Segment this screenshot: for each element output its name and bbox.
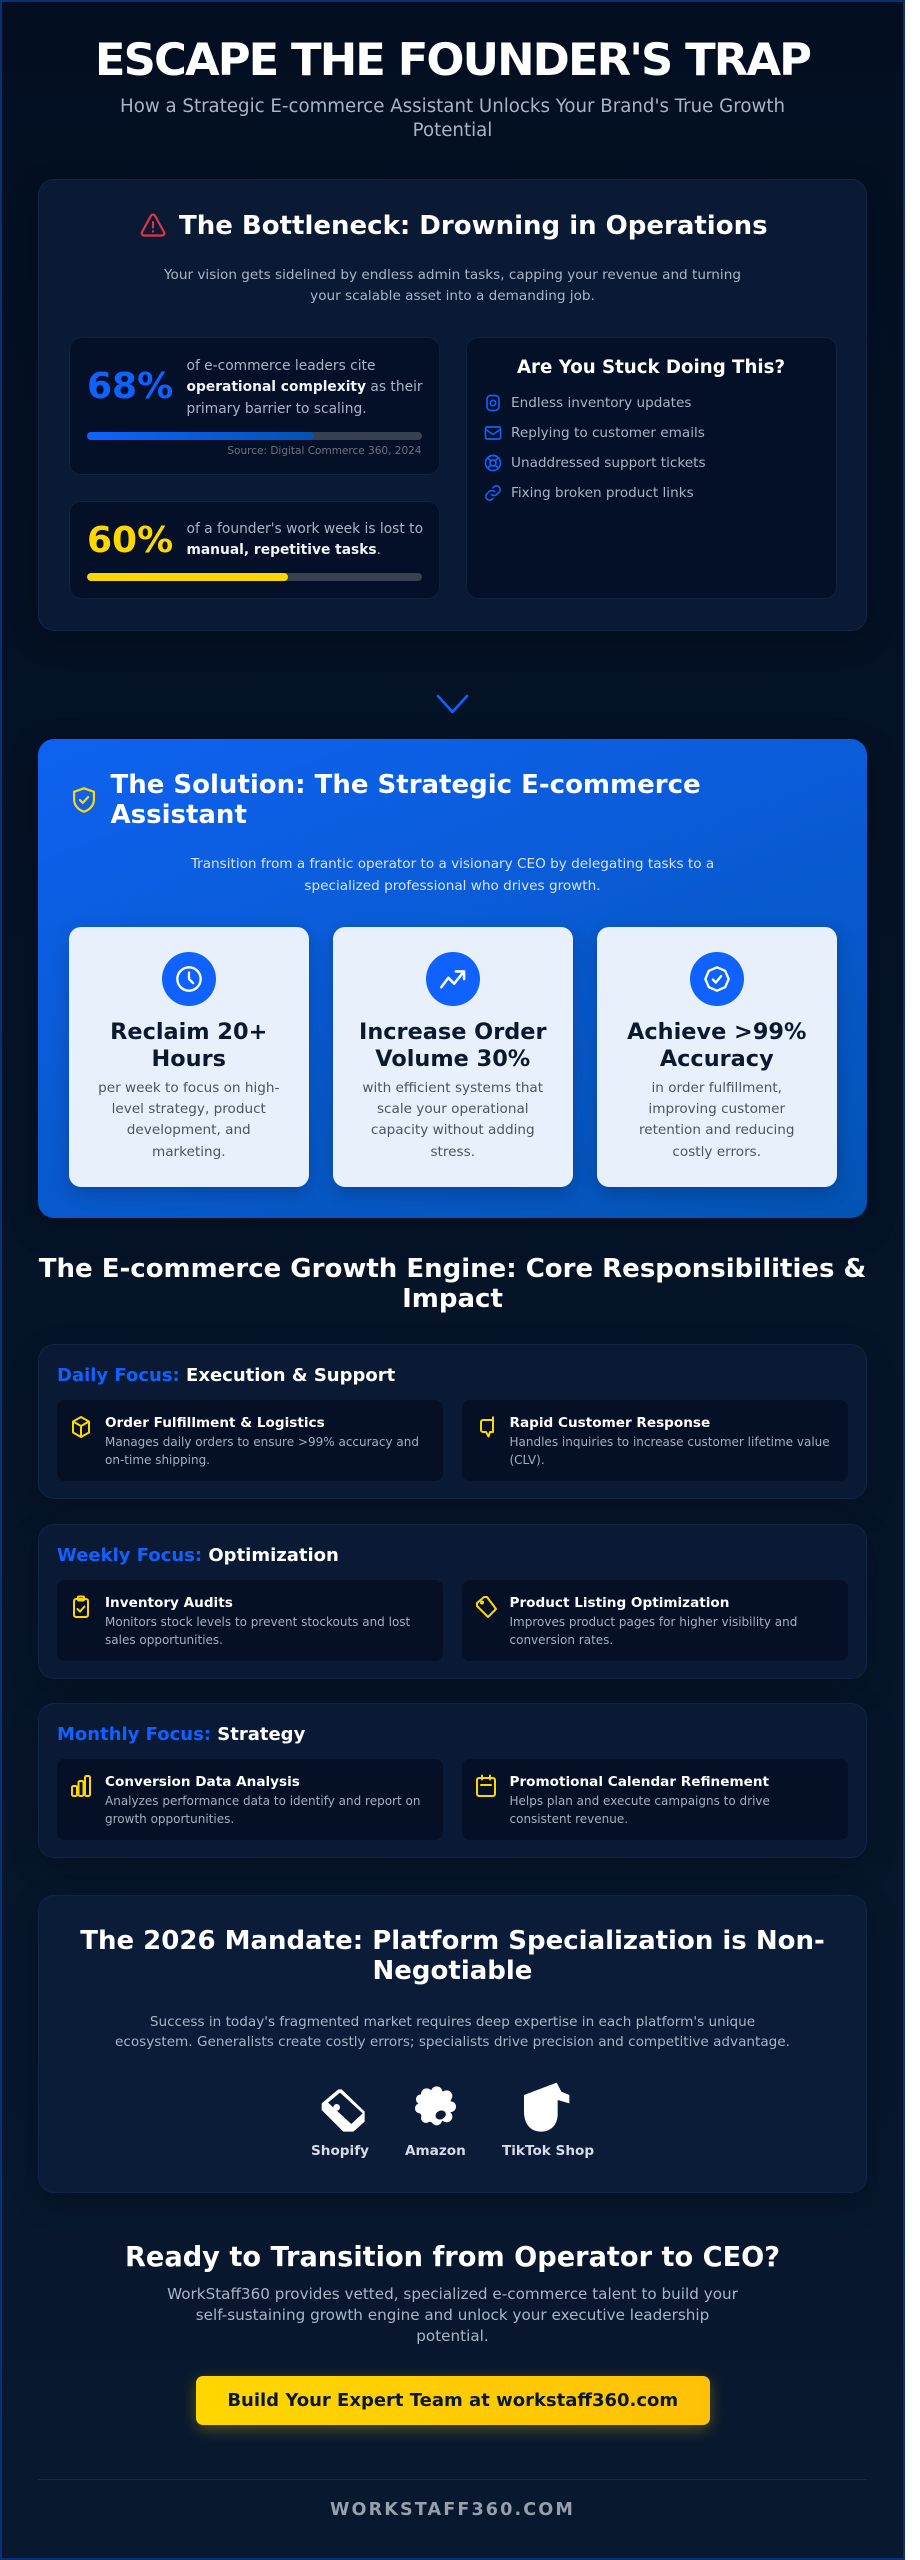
task text: Handles inquiries to increase customer lifetime value [510, 1435, 830, 1449]
button: build your team [196, 2376, 710, 2425]
icon: inventory [486, 394, 500, 412]
icon: Shopify [322, 2089, 365, 2132]
task text: Monitors stock levels to prevent stockouts and lost [105, 1615, 410, 1629]
button: build your team: Build Your Expert Team at workstaff360.com [227, 2390, 678, 2411]
heading: growth engine [38, 1254, 866, 1314]
focus heading: Monthly Focus: Strategy [57, 1724, 305, 1745]
task text [510, 1435, 830, 1467]
icon: warning triangle [140, 214, 166, 237]
task title: Conversion Data Analysis [105, 1774, 300, 1790]
text: solution intro: Transition from a frantic operator to a visionary CEO by delegating tasks to a [191, 856, 714, 872]
task title: Order Fulfillment & Logistics [105, 1414, 325, 1430]
subtitle [120, 96, 785, 141]
task title: Rapid Customer Response [510, 1414, 710, 1430]
text: mandate intro: Success in today's fragmented market requires deep expertise in each platform's unique [150, 2014, 755, 2030]
text: mandate intro: ecosystem. Generalists create costly errors; specialists drive precision and competitive advantage. [115, 2034, 790, 2050]
text: solution intro [190, 856, 714, 894]
icon: calendar [476, 1774, 496, 1797]
platform: Shopify [311, 2089, 369, 2159]
panel: the bottleneck [38, 179, 867, 631]
stat text: primary barrier to scaling. [186, 401, 367, 417]
card: reclaim hours [69, 927, 308, 1187]
task text: Manages daily orders to ensure >99% accuracy and [105, 1435, 419, 1449]
heading: 2026 mandate: The 2026 Mandate: Platform Specialization is Non- [80, 1926, 825, 1956]
task: order fulfillment [57, 1400, 443, 1481]
task text: Analyzes performance data to identify and report on [105, 1794, 420, 1808]
task: conversion data [57, 1759, 443, 1840]
task title: Promotional Calendar Refinement [510, 1774, 769, 1790]
card text: marketing. [152, 1144, 226, 1160]
heading: the bottleneck: The Bottleneck: Drowning in Operations [179, 210, 768, 240]
icon: support lifebuoy [484, 454, 502, 472]
card text [98, 1080, 279, 1160]
stat card: 60% [69, 501, 440, 599]
stat text [186, 521, 423, 558]
card title: Achieve >99% [627, 1018, 806, 1044]
task text: conversion rates. [510, 1633, 613, 1647]
focus heading: Daily Focus: Execution & Support [57, 1365, 395, 1386]
footer: WORKSTAFF360.COM [330, 2500, 575, 2520]
text: call to action: WorkStaff360 provides vetted, specialized e-commerce talent to build your [167, 2284, 738, 2302]
panel: monthly focus [38, 1703, 867, 1858]
label: Amazon [405, 2143, 466, 2159]
icon: badge check [690, 952, 744, 1006]
subtitle: How a Strategic E-commerce Assistant Unlocks Your Brand's True Growth [120, 96, 785, 117]
panel: 2026 mandate [38, 1895, 867, 2193]
stat card: 68% [69, 337, 440, 475]
platform: TikTok Shop [502, 2060, 594, 2180]
task text: Helps plan and execute campaigns to drive [510, 1794, 770, 1808]
panel: daily focus [38, 1344, 867, 1499]
card text [362, 1080, 543, 1160]
stat value: 68%: 68% [87, 366, 173, 407]
heading: growth engine: Impact [402, 1284, 503, 1314]
stat text [186, 358, 423, 417]
icon: link [485, 485, 501, 501]
item: inventory updates: Endless inventory updates [511, 395, 691, 411]
card text: retention and reducing [639, 1122, 795, 1138]
card text: scale your operational [377, 1101, 529, 1117]
panel: the solution [38, 739, 867, 1218]
card text: capacity without adding [371, 1122, 535, 1138]
progress bar: 60% [87, 573, 422, 581]
icon: box [72, 1416, 90, 1438]
task: promotional calendar [462, 1759, 848, 1840]
item: support tickets: Unaddressed support tickets [511, 455, 706, 471]
stat text: operational complexity as their [186, 379, 423, 395]
heading: growth engine: The E-commerce Growth Engine: Core Responsibilities & [39, 1254, 866, 1284]
focus heading: Weekly Focus: Optimization [57, 1545, 339, 1566]
card text: in order fulfillment, [652, 1080, 782, 1096]
card text: per week to focus on high- [98, 1080, 279, 1096]
text: call to action [0, 2284, 905, 2346]
task text [105, 1615, 410, 1647]
heading: the solution [110, 770, 701, 830]
task title: Product Listing Optimization [510, 1594, 729, 1610]
icon: email [484, 426, 502, 440]
task text: Improves product pages for higher visibility and [510, 1615, 797, 1629]
text: call to action: potential. [416, 2326, 489, 2344]
text: call to action: self-sustaining growth engine and unlock your executive leadership [196, 2306, 709, 2324]
task text [105, 1435, 419, 1467]
task title: Inventory Audits [105, 1594, 233, 1610]
text: bottleneck intro: Your vision gets sidelined by endless admin tasks, capping your revenue and turning [164, 266, 741, 282]
task text: on-time shipping. [105, 1453, 210, 1467]
item: customer emails: Replying to customer emails [511, 425, 705, 441]
text: bottleneck intro: your scalable asset into a demanding job. [310, 288, 595, 304]
task: customer response [462, 1400, 848, 1481]
icon: Amazon [405, 2060, 465, 2180]
task: product listing [462, 1580, 848, 1661]
stat text: manual, repetitive tasks. [186, 542, 381, 558]
task text: (CLV). [510, 1453, 545, 1467]
label: TikTok Shop [502, 2143, 594, 2159]
task text: consistent revenue. [510, 1812, 628, 1826]
progress bar: 68% [87, 432, 422, 440]
heading: call to action: Ready to Transition from Operator to CEO? [125, 2242, 780, 2272]
heading: 2026 mandate [80, 1926, 825, 1986]
icon: clock [162, 952, 216, 1006]
task text: sales opportunities. [105, 1633, 223, 1647]
text: solution intro: specialized professional who drives growth. [304, 878, 601, 894]
card title: Hours [152, 1046, 226, 1072]
panel: are you stuck checklist [466, 337, 836, 599]
card title: Reclaim 20+ [110, 1018, 267, 1044]
heading: the solution: The Solution: The Strategic E-commerce [110, 770, 701, 800]
title: ESCAPE THE FOUNDER'S TRAP [95, 33, 810, 86]
icon: tag [476, 1596, 497, 1618]
card text: improving customer [648, 1101, 785, 1117]
stat value: 60%: 60% [87, 520, 173, 561]
heading: are you stuck: Are You Stuck Doing This? [517, 357, 785, 378]
icon: shield check [72, 787, 96, 813]
card text: with efficient systems that [362, 1080, 543, 1096]
card: increase orders [333, 927, 572, 1187]
card text: stress. [430, 1144, 475, 1160]
task text [105, 1794, 420, 1826]
heading: 2026 mandate: Negotiable [373, 1956, 532, 1986]
card title: Volume 30% [375, 1046, 530, 1072]
card title [110, 1018, 267, 1072]
label: Shopify [311, 2143, 369, 2159]
card text: development, and [127, 1122, 251, 1138]
icon: trending up [426, 952, 480, 1006]
card: accuracy [597, 927, 836, 1187]
task: inventory audits [57, 1580, 443, 1661]
platform: Amazon [405, 2086, 466, 2159]
card title: Accuracy [660, 1046, 774, 1072]
task text [510, 1794, 770, 1826]
card text [639, 1080, 795, 1160]
text: bottleneck intro [164, 266, 741, 304]
arrow: chevron down [436, 694, 468, 714]
icon: TikTok Shop [502, 2060, 594, 2180]
source note: Source: Digital Commerce 360, 2024 [227, 445, 422, 457]
card title [359, 1018, 547, 1072]
icon: bar chart [71, 1775, 91, 1797]
panel: weekly focus [38, 1524, 867, 1679]
card text: level strategy, product [112, 1101, 266, 1117]
card title: Increase Order [359, 1018, 547, 1044]
card title [627, 1018, 806, 1072]
icon: clipboard check [73, 1596, 89, 1618]
task text [510, 1615, 797, 1647]
icon: chat bubble [480, 1416, 494, 1438]
card text: costly errors. [672, 1144, 761, 1160]
stat text: of a founder's work week is lost to [186, 521, 423, 537]
stat text: of e-commerce leaders cite [186, 358, 375, 374]
item: product links: Fixing broken product links [511, 485, 694, 501]
task text: growth opportunities. [105, 1812, 234, 1826]
text: mandate intro [115, 2014, 790, 2050]
subtitle: Potential [413, 120, 492, 141]
heading: the solution: Assistant [110, 800, 247, 830]
divider [38, 2479, 867, 2480]
